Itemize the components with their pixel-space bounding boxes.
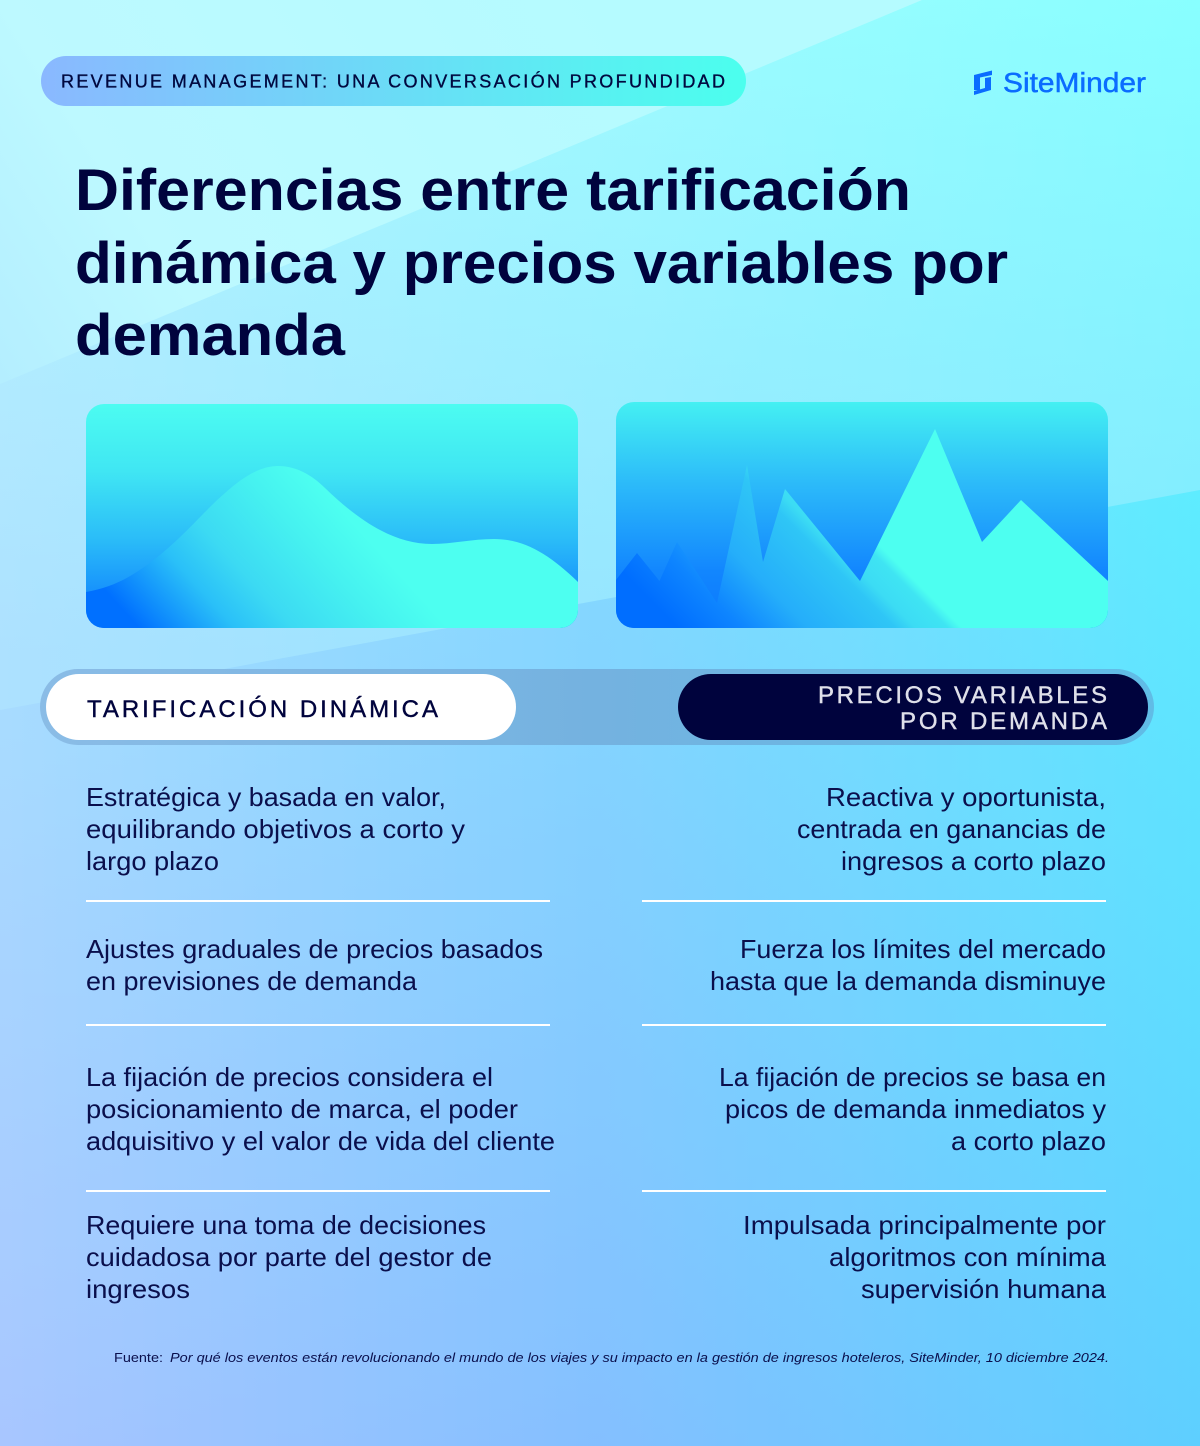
- label: tarificación dinámica: TARIFICACIÓN DINÁMICA: [87, 696, 438, 723]
- source footnote: Por qué los eventos están revolucionando el mundo de los viajes y su impacto en la gestión de ingresos hoteleros, SiteMinder, 10 diciembre 2024.: [170, 1350, 1109, 1365]
- row 1 right: [797, 782, 1106, 876]
- row 1 right: centrada en ganancias de: [797, 814, 1106, 844]
- row 3 left: posicionamiento de marca, el poder: [86, 1094, 518, 1124]
- logo: SiteMinder: [974, 67, 1146, 98]
- title: [75, 158, 1008, 368]
- row 3 right: a corto plazo: [951, 1126, 1106, 1156]
- title: Diferencias entre tarificación: [75, 158, 911, 223]
- row 2 right: [710, 934, 1106, 996]
- row 1 left: equilibrando objetivos a corto y: [86, 814, 465, 844]
- logo wordmark: SiteMinder: [1003, 67, 1146, 98]
- header pill: [41, 56, 746, 106]
- icon: logo mark: [974, 70, 992, 95]
- title: dinámica y precios variables por: [75, 231, 1008, 296]
- row 4 right: [743, 1210, 1107, 1304]
- row 1 left: Estratégica y basada en valor,: [86, 782, 446, 812]
- row 2 left: en previsiones de demanda: [86, 966, 418, 996]
- chart: smooth dynamic pricing curve: [86, 404, 578, 628]
- row 4 right: Impulsada principalmente por: [743, 1210, 1106, 1240]
- title: demanda: [75, 303, 346, 368]
- row 4 right: supervisión humana: [861, 1274, 1107, 1304]
- row 4 left: Requiere una toma de decisiones: [86, 1210, 486, 1240]
- row 4 left: ingresos: [86, 1274, 190, 1304]
- header pill: REVENUE MANAGEMENT: UNA CONVERSACIÓN PROFUNDIDAD: [61, 70, 725, 92]
- row 1 right: Reactiva y oportunista,: [826, 782, 1106, 812]
- right column: precios variables por demanda: [642, 782, 1107, 1304]
- label: precios variables por demanda: PRECIOS VARIABLES: [818, 682, 1107, 709]
- row 2 left: Ajustes graduales de precios basados: [86, 934, 543, 964]
- comparison header bar: [40, 669, 1154, 745]
- row 2 right: hasta que la demanda disminuye: [710, 966, 1106, 996]
- left column: tarificación dinámica: [86, 782, 555, 1304]
- row 1 left: largo plazo: [86, 846, 219, 876]
- row 3 right: La fijación de precios se basa en: [719, 1062, 1106, 1092]
- row 3 right: [719, 1062, 1106, 1156]
- row 2 right: Fuerza los límites del mercado: [740, 934, 1106, 964]
- row 1 right: ingresos a corto plazo: [841, 846, 1106, 876]
- label: precios variables por demanda: [678, 674, 1148, 740]
- row 4 left: [86, 1210, 492, 1304]
- row 4 right: algoritmos con mínima: [829, 1242, 1107, 1272]
- row 1 left: [86, 782, 465, 876]
- row 3 left: [86, 1062, 555, 1156]
- label: precios variables por demanda: POR DEMANDA: [900, 708, 1107, 735]
- source footnote: Fuente:: [114, 1350, 163, 1365]
- label: tarificación dinámica: [46, 674, 516, 740]
- row 3 right: picos de demanda inmediatos y: [725, 1094, 1106, 1124]
- row 3 left: La fijación de precios considera el: [86, 1062, 493, 1092]
- row 3 left: adquisitivo y el valor de vida del cliente: [86, 1126, 555, 1156]
- chart: spiky surge pricing curve: [616, 402, 1108, 628]
- row 2 left: [86, 934, 543, 996]
- row 4 left: cuidadosa por parte del gestor de: [86, 1242, 492, 1272]
